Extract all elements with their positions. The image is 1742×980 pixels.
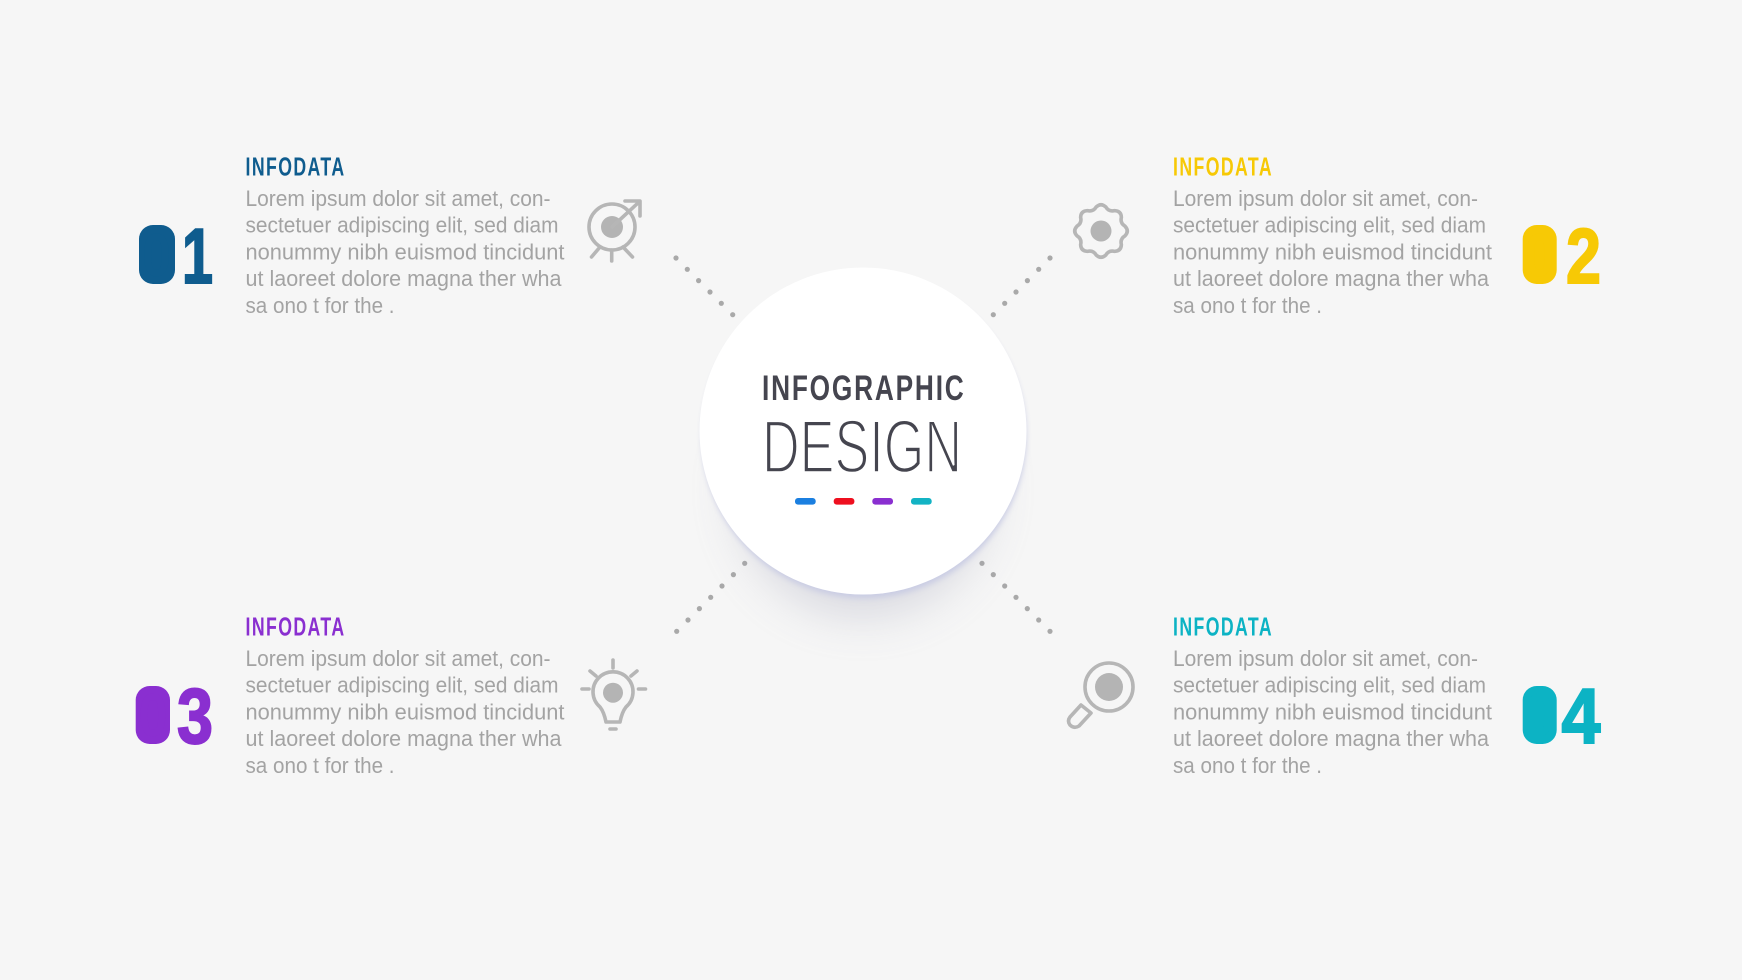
number 04 [1523,672,1600,760]
body text 03: Lorem ipsum dolor sit amet, con- [246,646,550,671]
panel: item 02 [1075,152,1601,318]
panel: item 04 [1068,612,1600,778]
body text 03: nonummy nibh euismod tincidunt [246,699,564,724]
body text 03: ut laoreet dolore magna ther wha [246,726,562,751]
body text 04 [1173,646,1492,778]
body text 04: sa ono t for the . [1173,753,1322,778]
body text 01: sa ono t for the . [246,293,394,318]
body text 02: sectetuer adipiscing elit, sed diam [1173,213,1486,238]
panel: item 03 [136,612,645,778]
body text 03: sectetuer adipiscing elit, sed diam [246,673,558,698]
number 01 [139,212,213,300]
icon: gear badge [1075,205,1127,257]
body text 02: nonummy nibh euismod tincidunt [1173,239,1492,264]
heading 02: INFODATA [1173,152,1272,181]
heading 03: INFODATA [246,612,344,641]
number 02: 0 [1525,222,1554,289]
body text 04: sectetuer adipiscing elit, sed diam [1173,673,1486,698]
icon: magnifier [1068,663,1133,727]
connector: top-left dotted line [673,255,735,317]
title: INFOGRAPHIC: INFOGRAPHIC [762,368,964,408]
number 04: 0 [1525,682,1554,749]
body text 02: ut laoreet dolore magna ther wha [1173,266,1490,291]
body text 04: Lorem ipsum dolor sit amet, con- [1173,646,1478,671]
connector: bottom-right dotted line [979,561,1053,634]
body text 01: nonummy nibh euismod tincidunt [246,239,564,264]
heading 01: INFODATA [246,152,344,181]
icon: light bulb [582,660,646,729]
body text 02 [1173,186,1492,318]
body text 01: Lorem ipsum dolor sit amet, con- [246,186,550,211]
body text 03: sa ono t for the . [246,753,394,778]
body text 04: nonummy nibh euismod tincidunt [1173,699,1492,724]
number 03 [136,672,213,760]
connector: bottom-left dotted line [674,561,747,634]
number 03: 0 [138,682,168,749]
body text 04: ut laoreet dolore magna ther wha [1173,726,1490,751]
number 01: 1 [182,212,213,300]
icon: target with arrow [589,201,640,261]
number 03: 3 [177,672,213,760]
number 01: 0 [142,222,171,289]
body text 02: Lorem ipsum dolor sit amet, con- [1173,186,1478,211]
panel: item 01 [139,152,640,318]
number 02: 2 [1566,212,1601,300]
body text 02: sa ono t for the . [1173,293,1322,318]
body text 03 [246,646,564,778]
colour key pills [795,498,932,505]
body text 01 [246,186,564,318]
title: DESIGN: DESIGN [762,404,962,488]
number 02 [1523,212,1601,300]
body text 01: sectetuer adipiscing elit, sed diam [246,213,558,238]
connector: top-right dotted line [991,255,1053,317]
body text 01: ut laoreet dolore magna ther wha [246,266,562,291]
number 04: 4 [1562,672,1600,760]
heading 04: INFODATA [1173,612,1272,641]
center circle with title [700,268,1026,615]
